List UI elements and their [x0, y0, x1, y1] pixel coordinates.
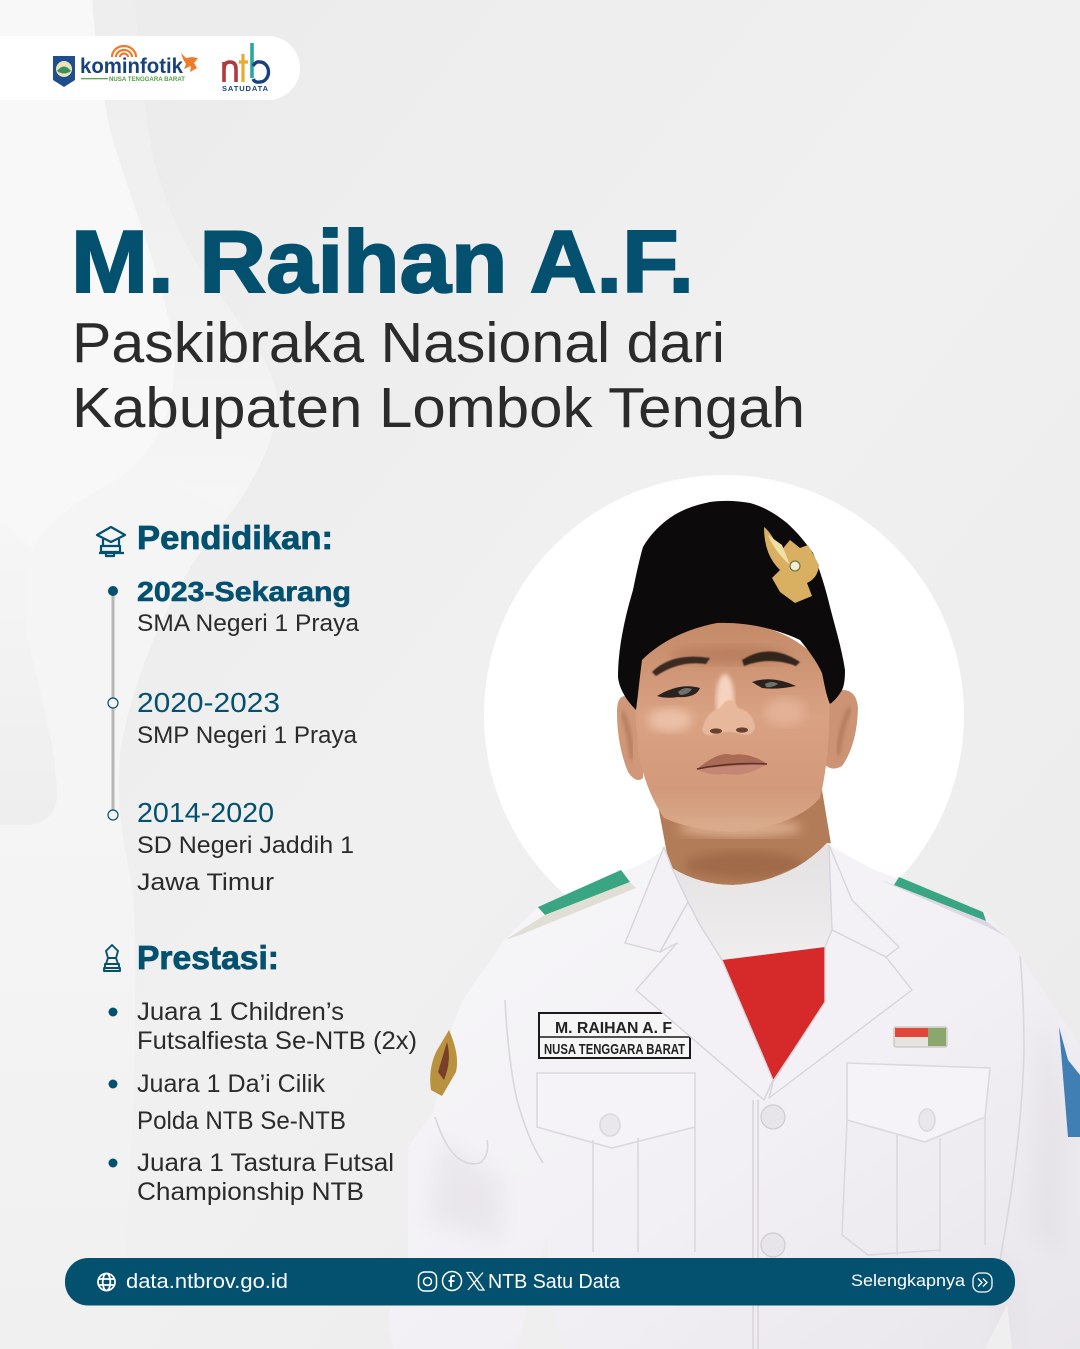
heading: Prestasi: Prestasi: [137, 939, 279, 976]
mouth [697, 754, 767, 775]
entry: SD: 2014-2020 [137, 797, 274, 828]
nose [702, 700, 755, 735]
section: achievements [104, 939, 417, 1206]
neck [658, 790, 831, 885]
subtitle [72, 311, 805, 440]
name patch: NUSA TENGGARA BARAT [544, 1041, 685, 1058]
left sleeve badge [430, 1030, 457, 1096]
right pocket [842, 1063, 990, 1255]
kominfotik wordmark: kominfotik [80, 55, 183, 78]
right sleeve badge [1059, 1027, 1080, 1137]
entry: SMA: 2023-Sekarang [137, 576, 351, 607]
entry: SMP [137, 687, 358, 749]
turtleneck collar [672, 843, 832, 960]
ntb satudata logo [222, 43, 269, 93]
green epaulettes [505, 870, 1007, 940]
name patch [539, 1013, 690, 1058]
entry: SMP: 2020-2023 [137, 687, 280, 718]
kominfotik subline: NUSA TENGGARA BARAT [109, 77, 185, 83]
icon: double chevron [973, 1273, 992, 1292]
entry: SD: SD Negeri Jaddih 1 [137, 832, 354, 859]
subtitle: Kabupaten Lombok Tengah [72, 376, 805, 440]
timeline [108, 586, 118, 820]
social handle: NTB Satu Data [488, 1271, 621, 1293]
section: education [97, 519, 360, 896]
achievement 3: Championship NTB [137, 1178, 364, 1206]
icon: graduation cap [97, 527, 125, 556]
garuda badge [764, 527, 819, 603]
icon: provincial shield [53, 56, 75, 87]
eyebrows [652, 657, 710, 676]
logo pill [0, 36, 300, 100]
icon: deer [181, 53, 198, 72]
read more: Selengkapnya [851, 1271, 966, 1290]
subtitle: Paskibraka Nasional dari [72, 311, 725, 375]
icon: facebook [442, 1272, 462, 1290]
heading: Pendidikan: Pendidikan: [137, 519, 333, 556]
eyes [657, 686, 700, 698]
website: data.ntbrov.go.id [126, 1270, 288, 1293]
face [632, 622, 830, 837]
icon: trophy [104, 945, 120, 971]
achievement 3: Juara 1 Tastura Futsal [137, 1149, 394, 1177]
achievement 1: Juara 1 Children’s [137, 998, 344, 1026]
jacket lapels [625, 845, 912, 1100]
achievement 1 [108, 998, 417, 1055]
jacket buttons [761, 1105, 785, 1257]
achievement 3 [108, 1149, 394, 1206]
title: M. Raihan A.F. [71, 212, 694, 311]
icon: X [467, 1272, 484, 1290]
entry: SMA [137, 576, 360, 637]
icon: instagram [418, 1272, 436, 1291]
icon: signal arcs [112, 46, 136, 57]
red scarf [722, 947, 825, 1080]
left pocket [537, 1073, 695, 1252]
black peci hat [618, 501, 845, 710]
flag pin [894, 1027, 947, 1047]
achievement 2: Polda NTB Se-NTB [137, 1107, 346, 1135]
arm gaps [517, 1233, 1012, 1349]
footer bar [65, 1258, 1015, 1306]
entry: SD: Jawa Timur [137, 869, 274, 896]
achievement 1: Futsalfiesta Se-NTB (2x) [137, 1027, 417, 1055]
jacket shading [438, 1158, 494, 1226]
white circle behind portrait [484, 475, 964, 955]
entry: SMP: SMP Negeri 1 Praya [137, 722, 358, 749]
ntb satudata logo: SATUDATA [222, 84, 269, 93]
portrait illustration [388, 501, 1080, 1349]
entry: SMA: SMA Negeri 1 Praya [137, 610, 360, 637]
name patch: M. RAIHAN A. F [555, 1020, 672, 1037]
achievement 2: Juara 1 Da’i Cilik [137, 1070, 325, 1098]
ears [617, 690, 858, 780]
entry: SD [137, 797, 354, 896]
achievement 2 [108, 1070, 346, 1135]
icon: globe [98, 1274, 115, 1290]
chest pockets [537, 1063, 990, 1255]
white uniform jacket [388, 845, 1080, 1349]
